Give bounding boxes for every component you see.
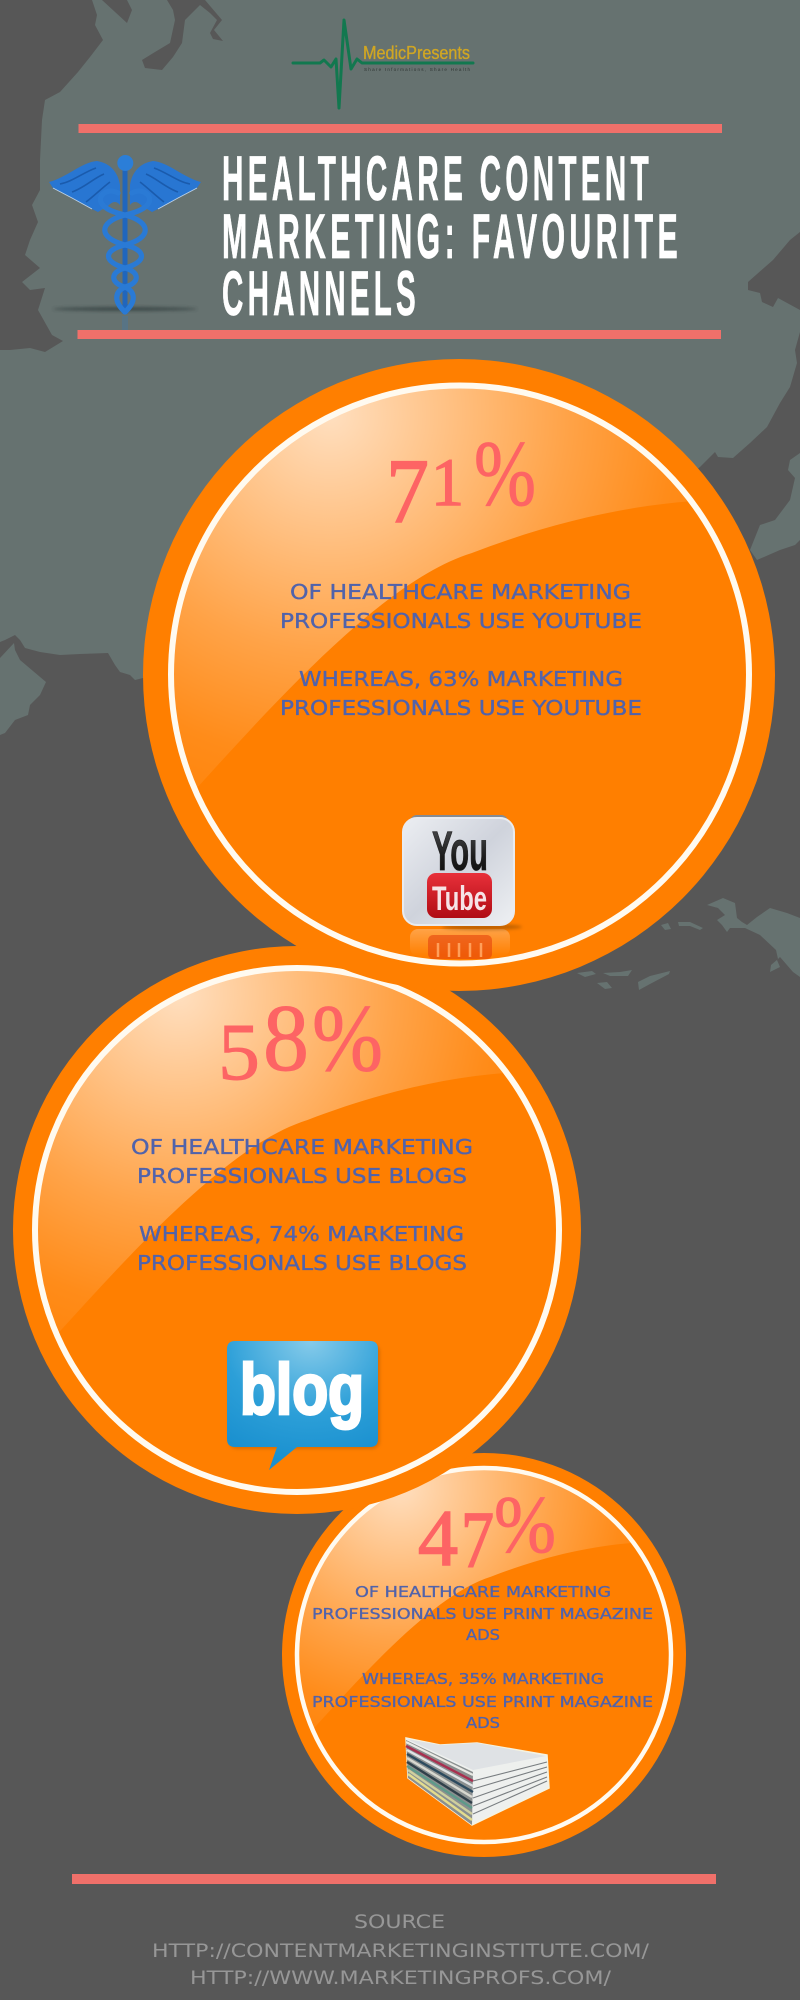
text: blog statistics (131, 1135, 473, 1275)
stat: 47%: 4 (418, 1495, 458, 1583)
second title divider bar (78, 330, 721, 339)
text: print magazine statistics: ADS (466, 1714, 500, 1732)
text: YouTube statistics: WHEREAS, 63% MARKETING (299, 667, 623, 691)
stat: 71%: 7 (386, 440, 429, 542)
text: print magazine statistics: WHEREAS, 35% MARKETING (362, 1670, 604, 1688)
source text (152, 1911, 650, 1989)
source text: HTTP://WWW.MARKETINGPROFS.COM/ (190, 1967, 612, 1989)
logo: MedicPresents: MedicPresents (363, 43, 470, 63)
icon: blog speech bubble (227, 1341, 380, 1470)
stat: 47% (418, 1479, 556, 1585)
stat: 71% (386, 423, 536, 542)
text: print magazine statistics: PROFESSIONALS USE PRINT MAGAZINE (312, 1605, 653, 1623)
panel: print magazine circle (282, 1453, 686, 1857)
icon: YouTube badge (403, 815, 522, 959)
text: print magazine statistics: OF HEALTHCARE MARKETING (355, 1583, 611, 1601)
text: blog statistics: PROFESSIONALS USE BLOGS (137, 1251, 467, 1275)
stat: 47%: % (494, 1479, 556, 1570)
stat: 58%: % (312, 985, 383, 1091)
stat: 58%: 5 (218, 1006, 260, 1097)
icon: blog speech bubble: blog (240, 1351, 364, 1430)
text: YouTube statistics: PROFESSIONALS USE YOUTUBE (280, 696, 642, 720)
text: print magazine statistics: PROFESSIONALS USE PRINT MAGAZINE (312, 1693, 653, 1711)
text: YouTube statistics: PROFESSIONALS USE YOUTUBE (280, 609, 642, 633)
panel: blogs circle (13, 946, 581, 1514)
panel: YouTube circle (143, 359, 775, 991)
top divider bar (78, 124, 722, 133)
text: print magazine statistics: ADS (466, 1626, 500, 1644)
title: CHANNELS (222, 259, 420, 329)
logo: MedicPresents (293, 20, 473, 108)
icon: YouTube badge: You (432, 819, 488, 882)
stat: 71%: % (474, 423, 536, 526)
icon: caduceus (49, 155, 201, 338)
source text: HTTP://CONTENTMARKETINGINSTITUTE.COM/ (152, 1940, 650, 1962)
icon: magazine stack (406, 1738, 549, 1825)
text: blog statistics: OF HEALTHCARE MARKETING (131, 1135, 473, 1159)
text: print magazine statistics (312, 1583, 653, 1732)
text: blog statistics: PROFESSIONALS USE BLOGS (137, 1164, 467, 1188)
stat: 47%: 7 (461, 1497, 494, 1585)
text: blog statistics: WHEREAS, 74% MARKETING (139, 1222, 464, 1246)
stat: 58%: 8 (263, 985, 309, 1091)
text: YouTube statistics (280, 580, 642, 720)
title (222, 144, 682, 329)
stat: 58% (218, 985, 383, 1097)
stat: 71%: 1 (431, 444, 464, 520)
source text: SOURCE (354, 1911, 445, 1933)
text: YouTube statistics: OF HEALTHCARE MARKETING (290, 580, 631, 604)
icon: YouTube badge: Tube (432, 880, 487, 918)
bottom divider bar (72, 1874, 716, 1884)
logo: MedicPresents: Share Informations, Share Health (364, 67, 470, 72)
